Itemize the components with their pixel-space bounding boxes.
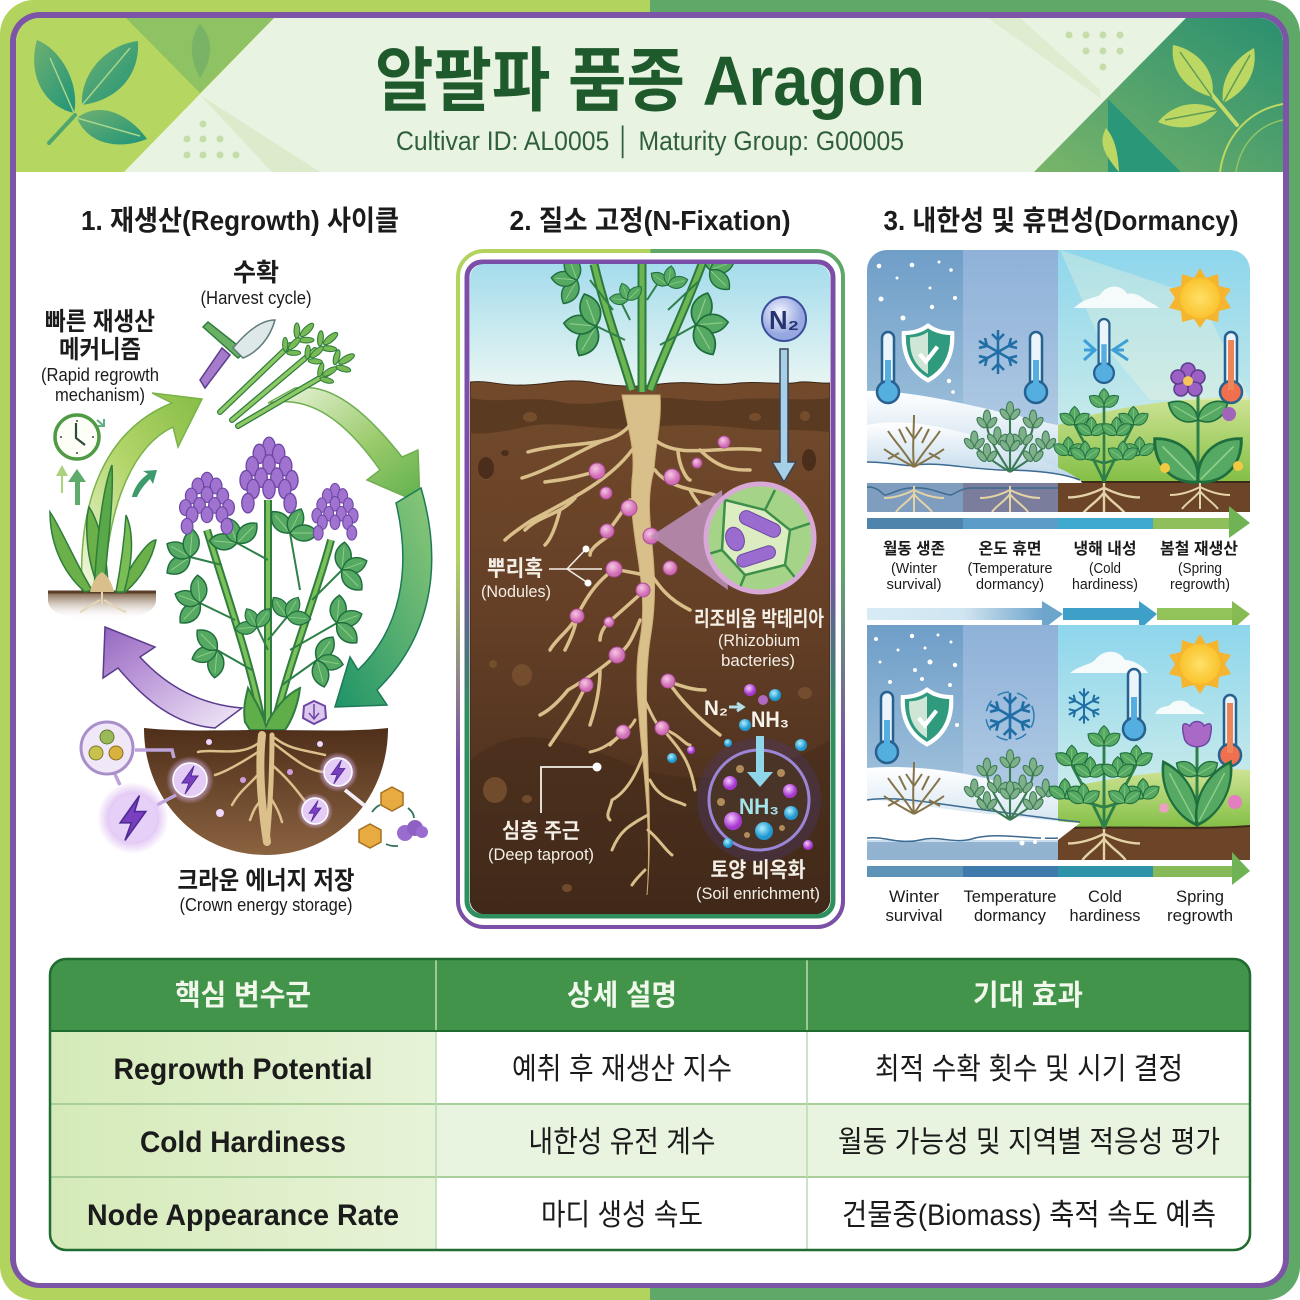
labels: bottom stages [886,887,1233,925]
icon: spring thermometer [1219,695,1241,766]
scene: sky and soil [470,235,830,914]
labels: top stages: (Spring [1178,560,1222,577]
plant: cold hardy [1051,389,1157,514]
soil enrichment circle [667,736,821,862]
labels: top stages: 냉해 내성 [1074,540,1136,558]
panel plant: alfalfa [153,437,377,730]
icon: shield [903,690,951,744]
row 2 [140,1126,1220,1159]
label: rapid regrowth: 빠른 재생산 [45,308,155,336]
labels: top stages: survival) [886,576,942,593]
icon: right dots [1066,32,1124,70]
heading: section 2: 2. 질소 고정(N-Fixation) [510,205,790,236]
labels: top stages [883,540,1238,593]
header: variable group: 핵심 변수군 [175,979,311,1012]
chemistry: N2 to NH3: NH₃ [751,707,789,732]
plant: winter brush [884,762,944,814]
row 3: 건물중(Biomass) 축적 속도 예측 [842,1199,1216,1232]
label: rhizobium: 리조비움 박테리아 [694,608,824,631]
icon: N2 descending arrow: N₂ [769,305,799,335]
icon: harvested stems [220,314,361,426]
labels: top stages: 월동 생존 [883,540,945,558]
label: harvest: 수확 [233,259,279,287]
scene: seasons bottom [867,625,1250,860]
callout: deep taproot: (Deep taproot) [488,845,594,864]
panel: dormancy [867,250,1252,925]
labels: bottom stages: dormancy [974,906,1046,925]
label: rhizobium: (Rhizobium [718,631,800,650]
arrow: timeline bottom [867,852,1250,885]
row 3: Node Appearance Rate [87,1199,399,1232]
icon: clock [55,415,104,459]
icon: growth arrows [56,465,157,505]
callout: nodules: (Nodules) [481,582,551,601]
heading: section 3: 3. 내한성 및 휴면성(Dormancy) [884,205,1238,236]
plant top [550,264,734,392]
title: 알팔파 품종 Aragon [375,42,925,120]
labels: top stages: regrowth) [1170,576,1230,593]
icon: sun [1169,268,1231,328]
plant: winter brush [884,415,944,512]
header: description: 상세 설명 [567,979,677,1012]
row 2: Cold Hardiness [140,1126,346,1159]
label: rapid regrowth: (Rapid regrowth [41,365,159,385]
icon: spring flower thermometer [1220,332,1242,403]
icon: purple hex [303,701,326,724]
arrow: timeline top [867,506,1250,538]
icon: shield [904,326,952,380]
label: soil enrichment: 토양 비옥화 [710,859,806,882]
row 3: 마디 생성 속도 [541,1199,703,1232]
labels: bottom stages: survival [886,906,942,925]
labels: bottom stages: Spring [1176,887,1224,906]
labels: top stages: 온도 휴면 [978,540,1042,558]
chemistry: N2 to NH3: N₂ [704,697,728,720]
plant: spring flower [1153,362,1243,510]
label: harvest [200,259,312,308]
label: rapid regrowth: 메커니즘 [59,336,141,364]
nodules [570,436,730,739]
icon: snowflake [979,330,1017,374]
icon: dormancy thermometer [1025,332,1047,403]
arrow: harvest to plant [268,387,420,503]
row 2: 월동 가능성 및 지역별 적응성 평가 [838,1126,1220,1159]
labels: top stages: (Temperature [968,560,1052,577]
label: soil enrichment: (Soil enrichment) [696,884,820,903]
labels: top stages: dormancy) [976,576,1044,593]
arrow: transition row [867,601,1250,630]
labels: top stages: (Winter [891,560,937,577]
callout: deep taproot: 심층 주근 [502,820,580,843]
icon: cold thermometer [1123,669,1145,740]
label: crown energy storage: (Crown energy storage) [180,895,352,915]
callout: deep taproot [488,762,602,864]
scene: seasons top [867,250,1252,514]
callout: nodules [481,546,602,601]
row 3 [87,1199,1216,1232]
label: crown energy storage: 크라운 에너지 저장 [178,867,354,895]
callout: nodules: 뿌리혹 [487,556,543,581]
roots [505,395,760,895]
row 1: 최적 수확 횟수 및 시기 결정 [875,1053,1183,1086]
labels: bottom stages: Cold [1088,887,1122,906]
row 1: Regrowth Potential [114,1053,372,1086]
icon: winter thermometer [876,692,898,763]
header banner [16,18,1283,172]
subtitle: Cultivar ID: AL0005 │ Maturity Group: G00005 [396,125,904,159]
heading: section 1: 1. 재생산(Regrowth) 사이클 [81,205,399,236]
icon: cold thermometer [1084,319,1128,383]
panel: nitrogen fixation [458,235,843,927]
icon: sun [1169,634,1231,694]
icon: left dots [184,120,240,158]
labels: bottom stages: Temperature [964,887,1056,906]
plant: dormant bush [963,750,1057,820]
icon: N2 descending arrow [762,297,806,482]
arrow: regrowth to harvest [82,393,202,590]
icon: left leaves [34,40,147,144]
plant: spring tulip [1153,722,1242,830]
labels: top stages: 봄철 재생산 [1160,540,1238,558]
header: expected effect: 기대 효과 [973,979,1083,1012]
icon: large energy bolt [97,782,169,854]
panel frame [458,251,843,927]
table header [50,959,1250,1031]
arrow: crown to regrowth [103,627,242,728]
row 1 [114,1053,1183,1086]
row 2: 내한성 유전 계수 [528,1126,716,1159]
label: rhizobium: bacteries) [721,651,795,670]
labels: top stages: hardiness) [1072,576,1138,593]
arrow: plant to crown [335,488,432,707]
label: crown energy storage [178,867,354,915]
label: rhizobium [694,608,824,670]
label: rapid regrowth [41,308,159,405]
labels: top stages: (Cold [1089,560,1121,577]
label: harvest: (Harvest cycle) [200,288,312,308]
label: soil enrichment [696,859,820,903]
plant: cold hardy [1046,726,1162,860]
icon: clouds [1070,652,1205,714]
soil: crown storage [144,728,388,855]
labels: bottom stages: Winter [889,887,939,906]
chemistry: N2 to NH3 [704,684,789,732]
small regrowth plant [48,465,156,620]
icon: energy conversion cycle [345,787,428,848]
labels: bottom stages: hardiness [1070,906,1140,925]
panel: regrowth cycle [41,259,432,915]
row 1: 예취 후 재생산 지수 [512,1053,732,1086]
table row shading [50,1031,1250,1250]
labels: bottom stages: regrowth [1167,906,1233,925]
label: rapid regrowth: mechanism) [55,385,145,405]
icon: energy orbs in soil [166,739,358,829]
magnifier: rhizobium [651,484,820,600]
icon: right leaves [1102,45,1283,172]
icon: winter thermometer [877,332,899,403]
plant: dormant bush [963,402,1057,512]
icon: starch granules [81,722,176,805]
table: key variables [50,959,1250,1250]
icon: snowflake [986,692,1034,740]
icon: cold snowflake [1069,688,1099,724]
icon: cloud [1074,287,1159,308]
icon: harvest knife [200,320,275,388]
soil enrichment circle: NH₃ [739,794,779,819]
